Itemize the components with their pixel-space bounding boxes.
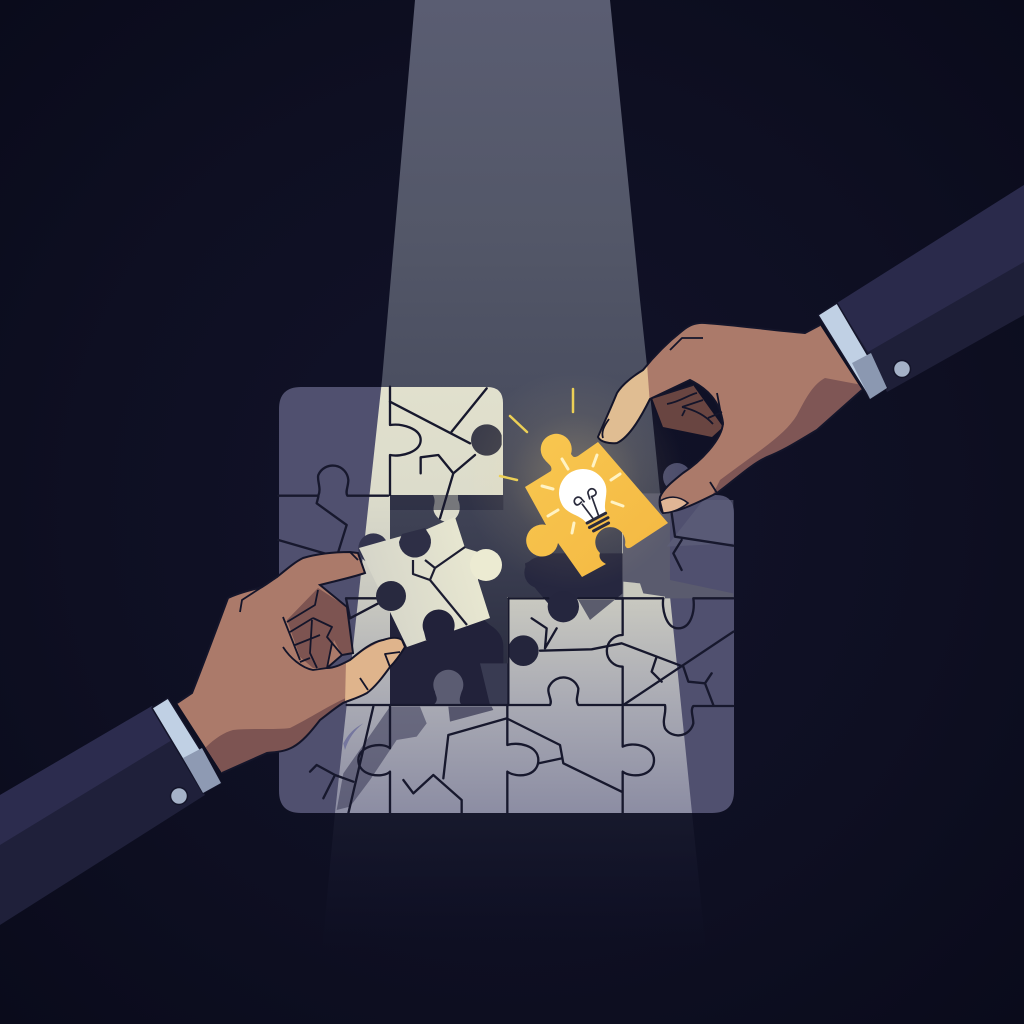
- icon: light bulb: [551, 461, 623, 540]
- palm shadow: [206, 698, 346, 773]
- cuff: [152, 698, 221, 793]
- hand outline: [598, 323, 862, 513]
- spotlight beam: [322, 0, 706, 950]
- left hand: [177, 552, 420, 780]
- middle right cell lines: [508, 598, 733, 628]
- slot tab right: [508, 635, 539, 666]
- right sleeve: [818, 185, 1024, 399]
- finger lines: [602, 338, 723, 493]
- right column cracks: [672, 513, 733, 570]
- shadows below slot: [337, 707, 427, 810]
- refraction glint: [343, 723, 363, 750]
- left socket: [376, 581, 406, 611]
- light on index finger: [599, 366, 650, 442]
- floating white puzzle piece: [359, 517, 502, 647]
- right hand: [597, 324, 862, 514]
- palm shadow: [713, 378, 862, 494]
- puzzle board: [279, 380, 734, 813]
- bottom row lines: [347, 677, 733, 735]
- curled fingers: [652, 385, 723, 437]
- lower socket: [423, 610, 458, 640]
- shadow under top piece: [390, 495, 503, 510]
- gold piece shadow: [525, 553, 623, 613]
- outer yellow sparks: [500, 389, 573, 480]
- thumb tip: [660, 497, 688, 513]
- socket in top piece: [471, 424, 502, 456]
- lit area of board: [335, 380, 692, 813]
- button: [894, 360, 910, 378]
- gold light bulb puzzle piece: [525, 434, 668, 577]
- left column lines: [278, 466, 388, 496]
- light on thumb: [345, 638, 404, 701]
- top piece lines: [390, 387, 421, 495]
- glow around gold piece: [465, 370, 685, 590]
- cracks on white piece: [413, 547, 467, 625]
- slot tab from below: [433, 670, 463, 705]
- hand outline: [177, 552, 405, 773]
- board tab behind right hand: [663, 463, 691, 491]
- cuff: [818, 303, 887, 399]
- socket in lower middle cell: [548, 591, 579, 622]
- right tab: [470, 549, 502, 581]
- shadow on right cell: [578, 593, 623, 620]
- shaded right column: [623, 493, 733, 598]
- piece rays: [542, 455, 623, 533]
- left sleeve: [0, 698, 221, 925]
- finger lines: [240, 552, 400, 690]
- curled fingers: [287, 588, 352, 668]
- board shadows and empty slots: [337, 424, 733, 810]
- socket on left column: [358, 533, 388, 563]
- puzzle seam and crack lines: [278, 387, 733, 813]
- top piece lower tab: [433, 495, 460, 522]
- button: [170, 788, 188, 804]
- dark empty slot: [390, 597, 503, 705]
- top socket: [399, 528, 431, 558]
